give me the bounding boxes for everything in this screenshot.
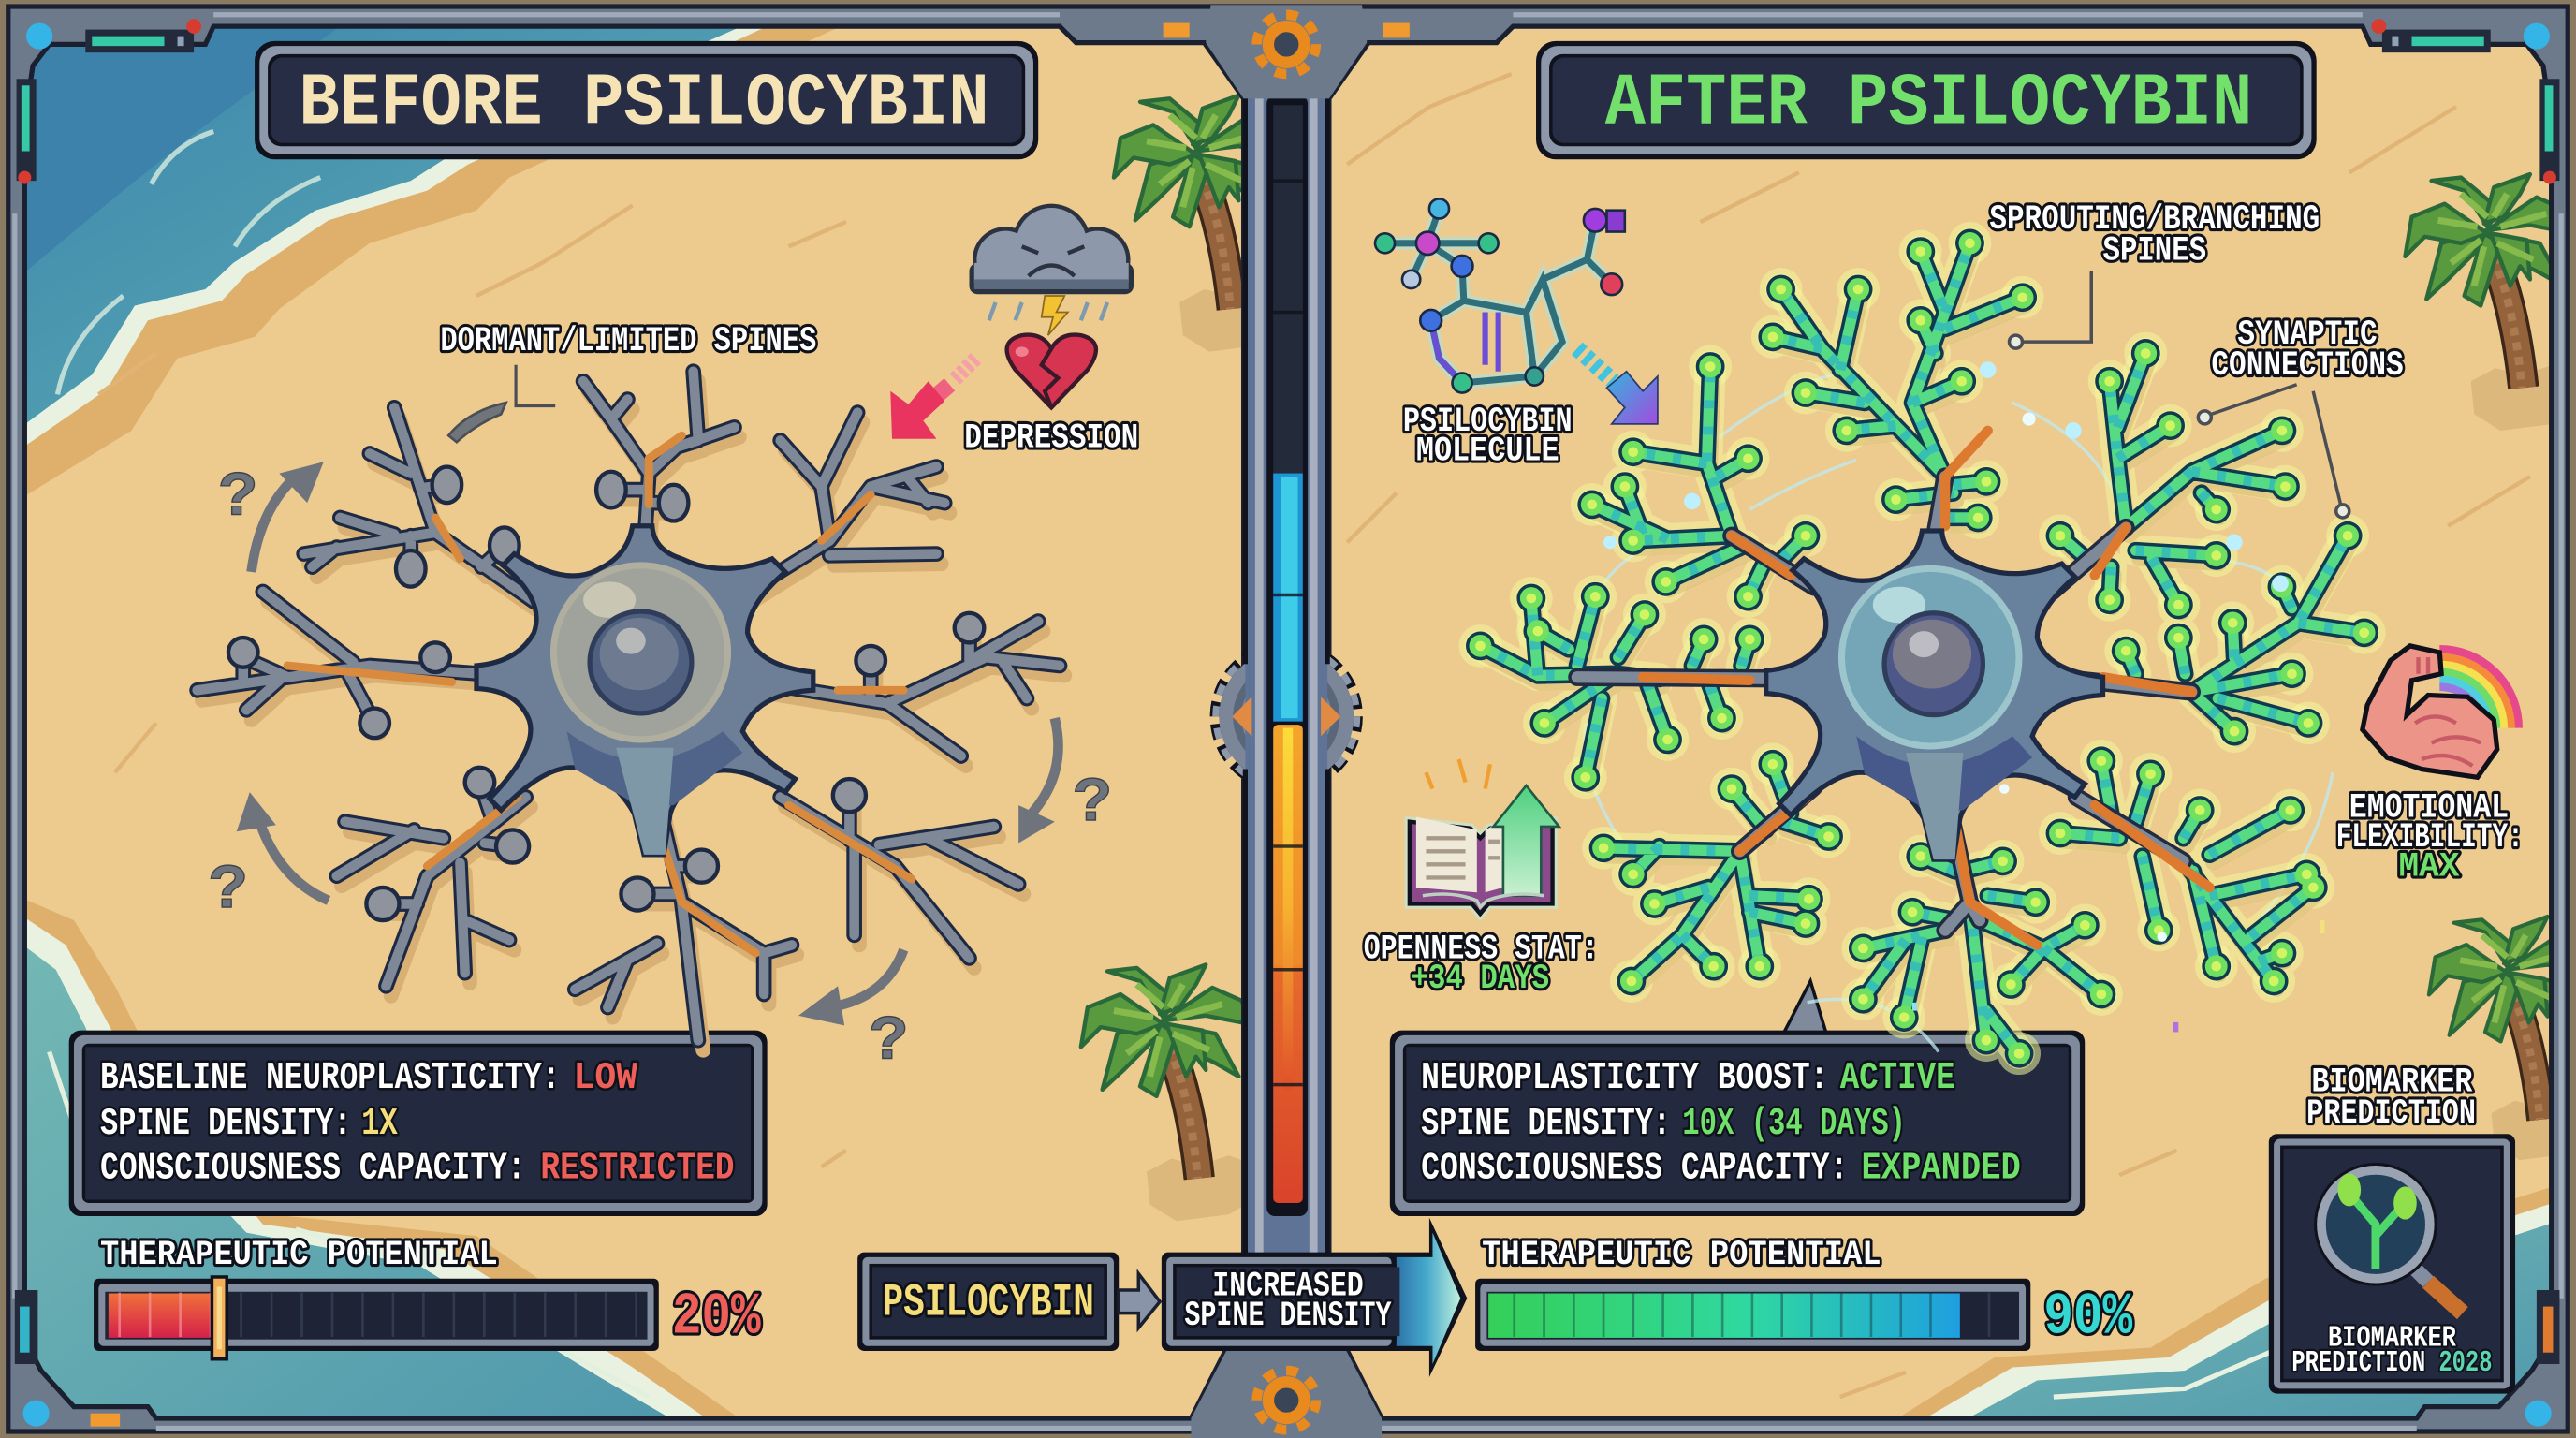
progress bar: after (1475, 1279, 2030, 1351)
sparkles (1603, 361, 2324, 1032)
value: 20 percent: 20% (672, 1284, 761, 1351)
arrow: increased spine density (1162, 1218, 1467, 1377)
stat: baseline neuroplasticity: LOW (574, 1057, 638, 1100)
bar marker (211, 1275, 228, 1360)
label: emotional flexibility (2336, 788, 2524, 888)
neuron: after (1480, 243, 2367, 1062)
label: psilocybin molecule: PSILOCYBIN (1403, 403, 1573, 442)
palm tree: top (1112, 94, 1241, 352)
synaptic connection arcs (1585, 370, 2333, 1051)
title: before (255, 41, 1038, 159)
center knob: half gears (1216, 646, 1357, 787)
frame: status bar left (85, 30, 194, 52)
label: sprouting spines: SPROUTING/BRANCHING (1989, 200, 2320, 240)
track: warm segment (1273, 725, 1303, 1203)
icon: broken heart (1007, 335, 1096, 407)
label: therapeutic potential after: THERAPEUTIC POTENTIAL (1482, 1236, 1881, 1275)
arrow: molecule to neuron (1577, 348, 1658, 424)
callout: dormant leader line (448, 365, 555, 442)
curved arrow and question: bottom (798, 950, 909, 1078)
stat panel: after (1390, 981, 2085, 1216)
title: before: BEFORE PSILOCYBIN (299, 62, 989, 146)
soma: before (476, 526, 813, 855)
arrow: depression to neuron (890, 359, 976, 439)
label: synaptic connections: CONNECTIONS (2211, 346, 2404, 386)
curved arrow and question: right (1018, 718, 1112, 844)
label: biomarker prediction: PREDICTION (2306, 1094, 2476, 1134)
label: biomarker prediction: BIOMARKER (2311, 1064, 2473, 1103)
panel: before scene (0, 0, 1298, 1438)
label: dormant spines: DORMANT/LIMITED SPINES (440, 322, 816, 361)
stat: neuroplasticity boost: NEUROPLASTICITY BOOST: (1421, 1057, 1828, 1100)
icon: magnifying glass with spine (2321, 1170, 2463, 1313)
icon: sad storm cloud (970, 204, 1134, 335)
icon: flexing brain with rainbow (2363, 646, 2519, 777)
label: emotional flexibility: MAX (2398, 848, 2460, 888)
stat: spine density: 1X (361, 1103, 398, 1146)
stat: consciousness capacity: CONSCIOUSNESS CAPACITY: (100, 1148, 526, 1191)
curved arrow and question: upper left (218, 462, 324, 572)
stat: baseline neuroplasticity: BASELINE NEUROPLASTICITY: (100, 1057, 560, 1100)
palm tree: upper right (2403, 172, 2550, 431)
track: dark segment (1273, 105, 1303, 474)
icon: psilocybin molecule (1375, 198, 1625, 393)
icon: open book with up arrow (1410, 759, 1559, 914)
label: psilocybin molecule (1403, 403, 1573, 472)
stat: consciousness capacity: EXPANDED (1862, 1148, 2021, 1191)
label: synaptic connections: SYNAPTIC (2237, 315, 2378, 355)
curved arrow and question: lower left (209, 792, 329, 927)
panel: biomarker (2269, 1134, 2515, 1394)
gear: bottom (1191, 1314, 1382, 1438)
stat: consciousness capacity: CONSCIOUSNESS CAPACITY: (1421, 1148, 1848, 1191)
label: openness stat: OPENNESS STAT: (1364, 930, 1599, 969)
arrow: small connector (1119, 1273, 1160, 1328)
label: openness stat: +34 DAYS (1412, 960, 1549, 999)
title: after: AFTER PSILOCYBIN (1605, 62, 2252, 146)
stat: spine density: SPINE DENSITY: (1421, 1103, 1671, 1146)
arrow: increased spine density: INCREASED (1212, 1267, 1364, 1306)
palm tree: lower right (2426, 914, 2550, 1160)
box: psilocybin (857, 1253, 1119, 1351)
callout: synaptic leader lines (2198, 385, 2349, 518)
bar fill: red (109, 1294, 217, 1338)
center column: progress track (1245, 82, 1327, 1323)
curved arrow and question: lower left: ? (209, 856, 248, 927)
bar fill: green to blue (1488, 1294, 1960, 1338)
label: emotional flexibility: EMOTIONAL (2349, 788, 2509, 828)
curved arrow and question: bottom: ? (869, 1006, 909, 1078)
value: 90 percent: 90% (2043, 1284, 2132, 1351)
spines: dormant bulbs (228, 467, 984, 920)
panel: after scene (1314, 0, 2576, 1438)
label: openness stat (1364, 930, 1599, 999)
stat: spine density (1421, 1103, 1906, 1146)
panel: biomarker: BIOMARKER (2328, 1323, 2456, 1356)
label: sprouting spines (1989, 200, 2320, 271)
label: sprouting spines: SPINES (2103, 231, 2206, 271)
title: after (1536, 41, 2317, 159)
stat: neuroplasticity boost: ACTIVE (1840, 1057, 1955, 1100)
gear: top (1206, 5, 1367, 98)
label: psilocybin molecule: MOLECULE (1416, 433, 1559, 472)
frame: status bar right (2382, 30, 2491, 52)
curved arrow and question: right: ? (1073, 769, 1112, 840)
label: biomarker prediction (2306, 1064, 2476, 1134)
box: psilocybin: PSILOCYBIN (882, 1276, 1094, 1328)
center knob: orange chevrons (1232, 697, 1340, 736)
stat: spine density: 10X (34 DAYS) (1682, 1103, 1906, 1146)
stat: consciousness capacity: RESTRICTED (540, 1148, 735, 1191)
soma: after (1766, 531, 2103, 859)
track: blue segment (1273, 474, 1303, 722)
curved arrow and question: upper left: ? (218, 462, 258, 534)
progress bar: before (94, 1275, 659, 1360)
neuron: before (198, 372, 1064, 1050)
label: synaptic connections (2211, 315, 2404, 386)
callout: sprouting leader line (2009, 271, 2091, 348)
label: depression: DEPRESSION (964, 418, 1138, 458)
palm tree: bottom (1078, 962, 1241, 1221)
label: therapeutic potential before: THERAPEUTIC POTENTIAL (100, 1236, 498, 1275)
arrow: increased spine density: SPINE DENSITY (1184, 1297, 1392, 1336)
stat panel: before (69, 1031, 768, 1216)
stat: spine density: SPINE DENSITY: (100, 1103, 352, 1146)
panel: biomarker: PREDICTION 2028 (2291, 1347, 2492, 1380)
